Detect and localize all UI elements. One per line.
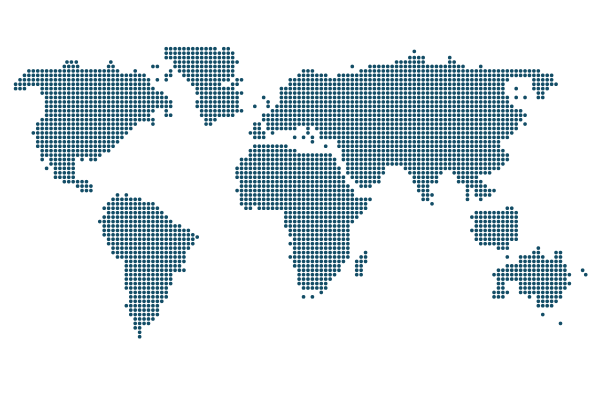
continent: Eurasia bbox=[250, 51, 557, 204]
continent: Greenland bbox=[166, 49, 242, 124]
continent: Australia bbox=[494, 248, 586, 323]
continent: North America bbox=[16, 62, 171, 191]
island: Indonesia bbox=[472, 208, 517, 248]
continent: Africa bbox=[237, 146, 370, 297]
continent: South America bbox=[100, 195, 198, 337]
island: Madagascar bbox=[357, 253, 366, 275]
